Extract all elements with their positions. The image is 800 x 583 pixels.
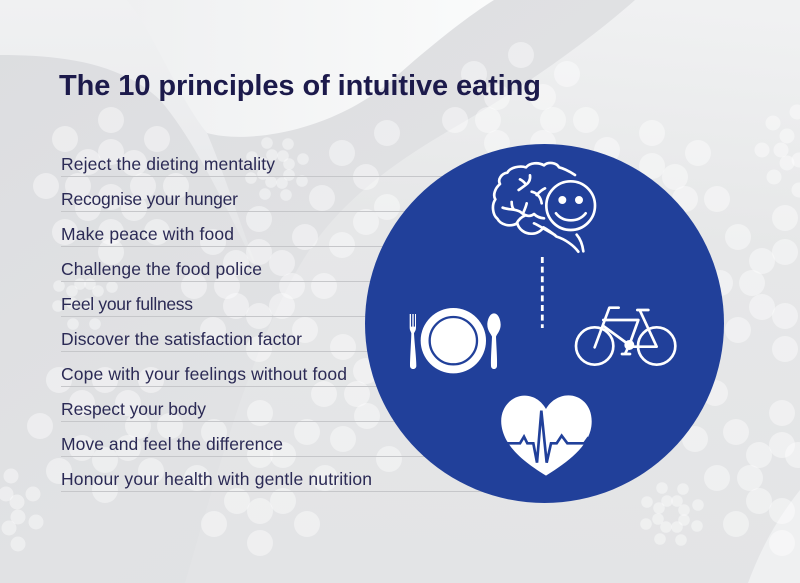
icon: plate with cutlery <box>410 308 501 373</box>
principle 5: Feel your fullness <box>61 294 193 314</box>
principle 10: Honour your health with gentle nutrition <box>61 469 372 489</box>
icon: heart with pulse <box>501 395 592 476</box>
list of 10 principles <box>61 154 545 492</box>
blue circle <box>365 144 724 503</box>
icon: bicycle <box>576 308 675 365</box>
principle 2: Recognise your hunger <box>61 189 238 209</box>
principle 9: Move and feel the difference <box>61 434 283 454</box>
principle 8: Respect your body <box>61 399 206 419</box>
principle 7: Cope with your feelings without food <box>61 364 347 384</box>
icon: brain with smiley <box>493 163 595 252</box>
principle 3: Make peace with food <box>61 224 234 244</box>
dashed connector <box>541 257 544 328</box>
principle 4: Challenge the food police <box>61 259 262 279</box>
title: The 10 principles of intuitive eating <box>59 70 541 102</box>
principle 1: Reject the dieting mentality <box>61 154 275 174</box>
principle 6: Discover the satisfaction factor <box>61 329 302 349</box>
